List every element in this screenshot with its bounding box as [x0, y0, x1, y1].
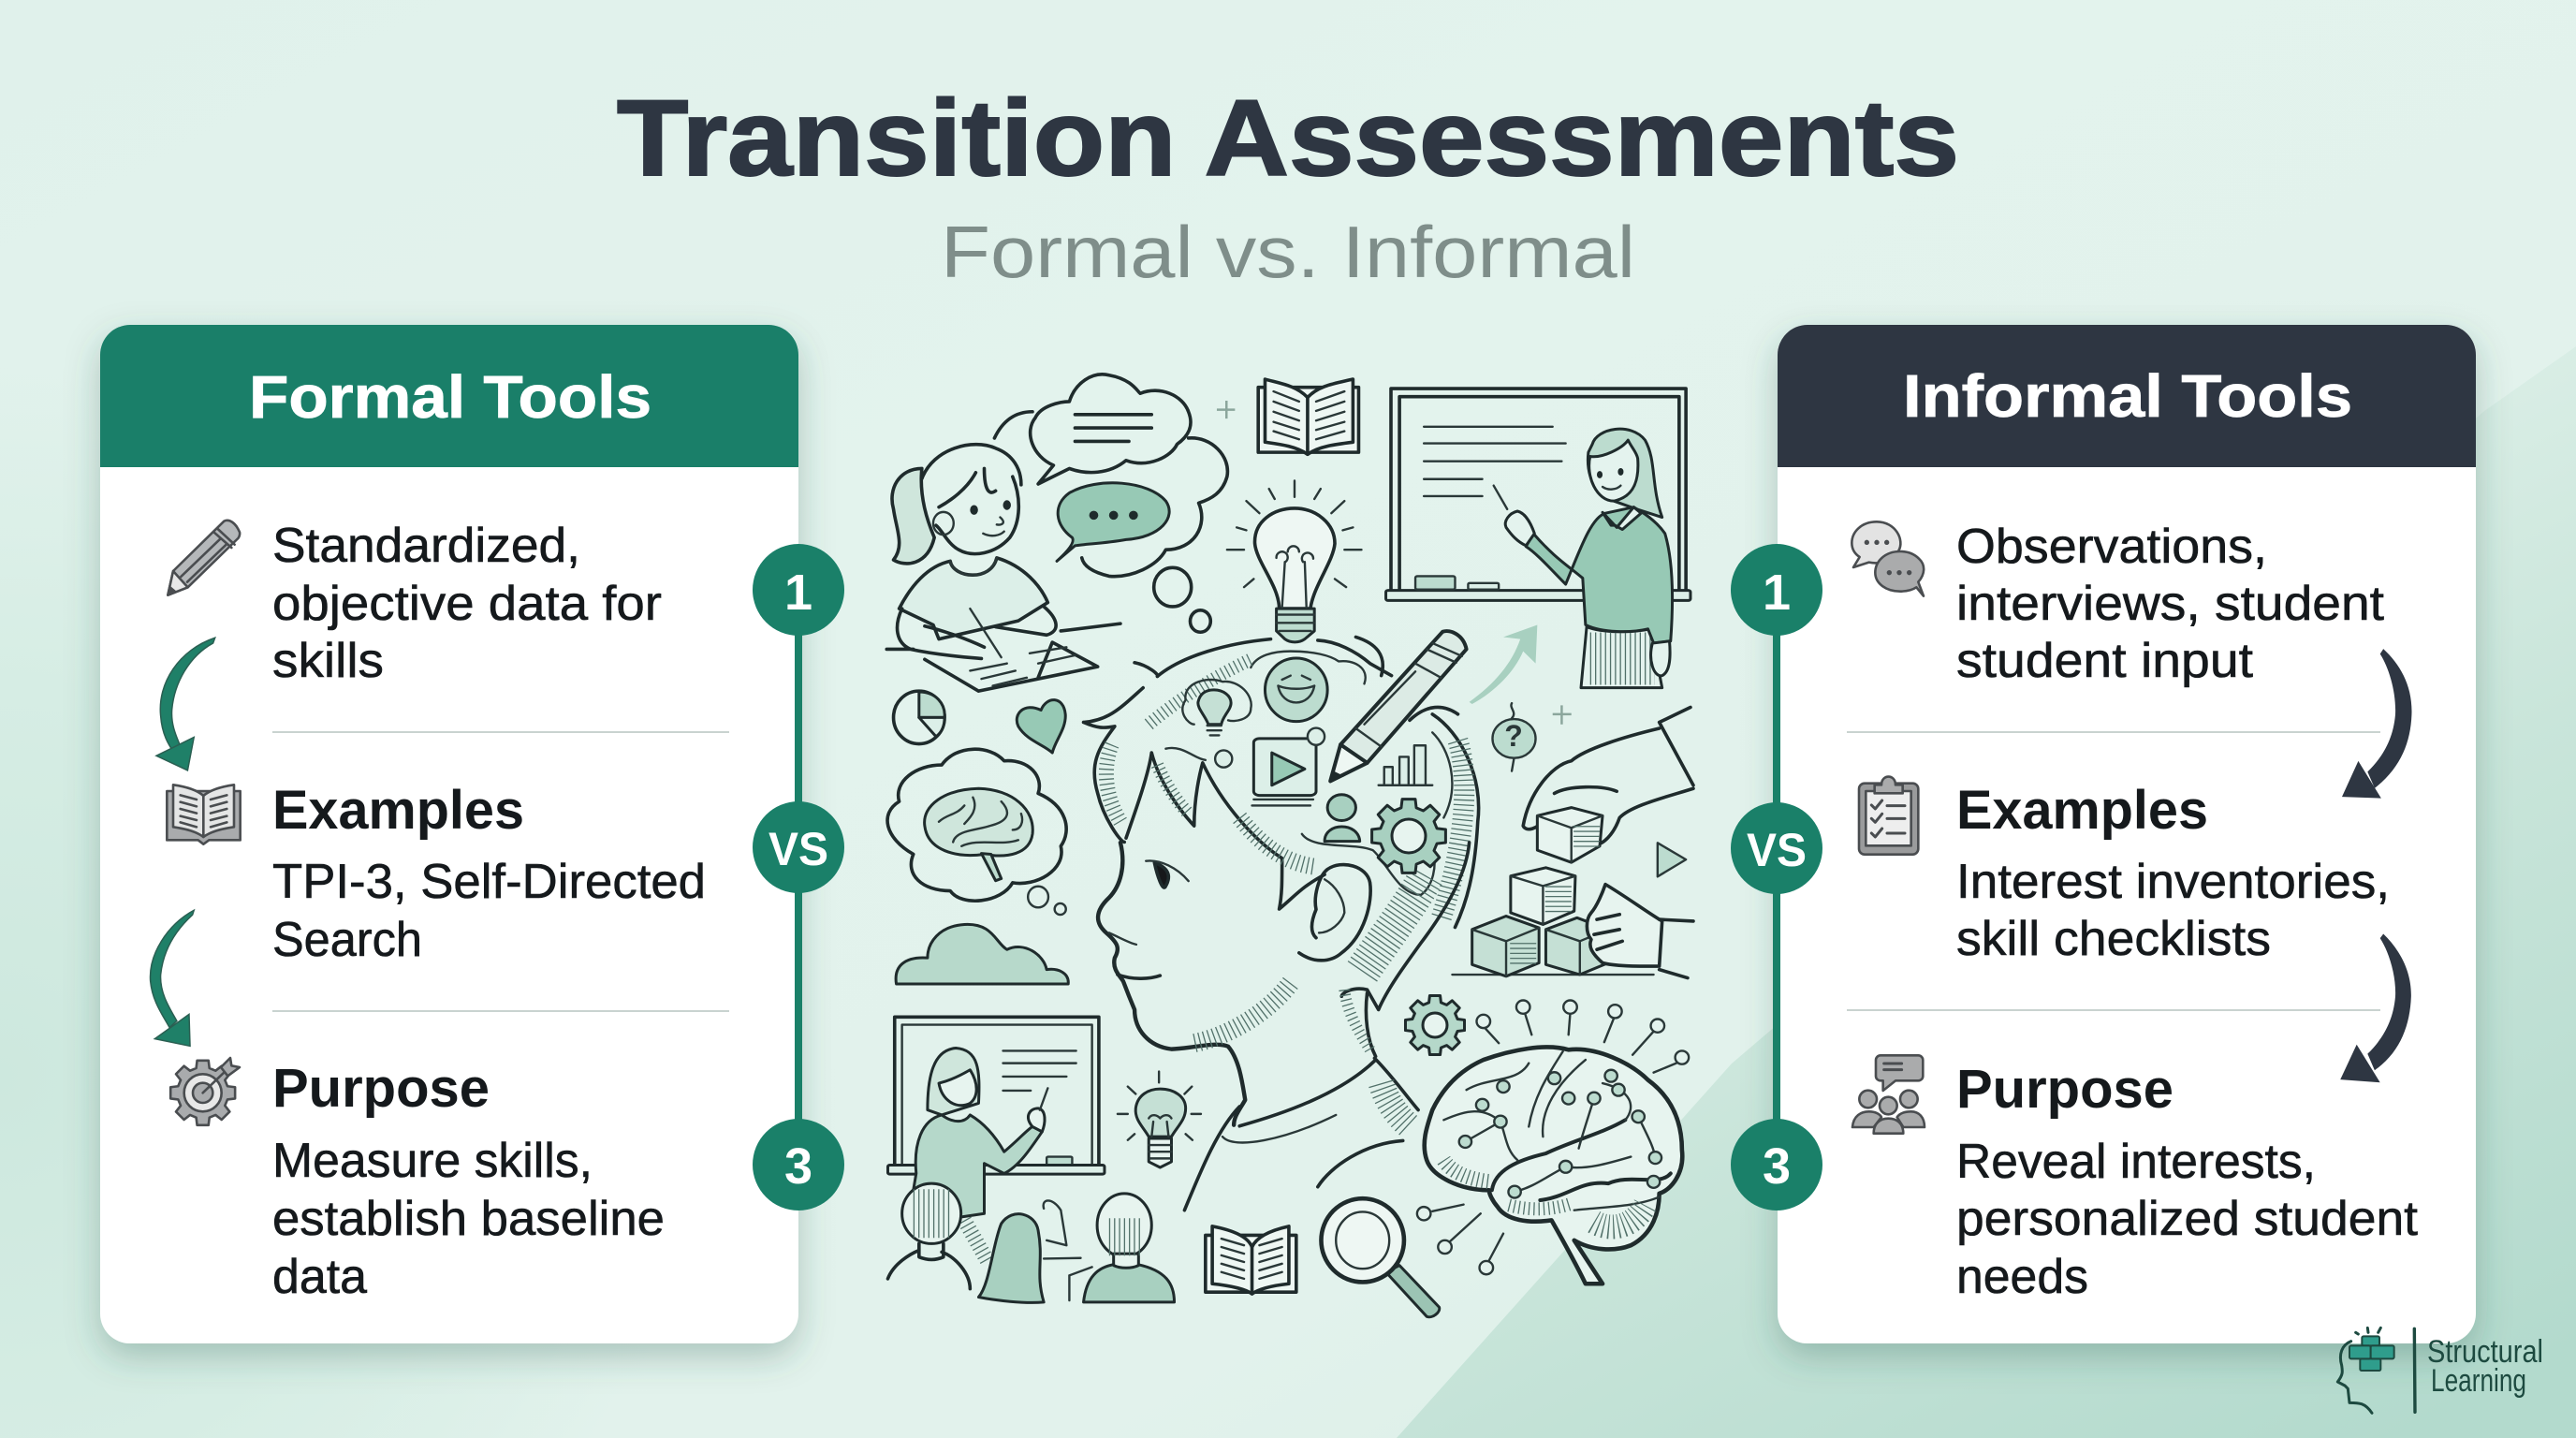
question mark badge: [1492, 703, 1536, 771]
gear and connector pins: [1417, 1001, 1689, 1274]
badge 3: [1731, 1119, 1822, 1211]
magnifying glass: [1321, 1198, 1440, 1317]
classroom with teacher and students: [887, 1017, 1175, 1302]
badge 3: 3: [1763, 1138, 1791, 1195]
central illustration: [886, 374, 1693, 1317]
icon: open book top: [1258, 379, 1358, 454]
plus mark: [1217, 401, 1235, 418]
icon: group discussion: [1852, 1055, 1925, 1134]
header: informal tools: Informal Tools: [1903, 362, 2352, 430]
header: formal tools: [100, 325, 798, 467]
timeline: informal: [1731, 544, 1822, 1211]
section: purpose: Purpose: [1956, 1059, 2174, 1120]
icon: clipboard checklist: [1859, 777, 1918, 855]
open book bottom: [1206, 1226, 1296, 1294]
section: purpose: Reveal interests,: [1956, 1135, 2316, 1189]
section: examples: Examples: [272, 780, 524, 841]
section: purpose: personalized student: [1956, 1192, 2419, 1246]
hand with cube: [1523, 707, 1693, 862]
badge VS: VS: [1747, 824, 1807, 876]
thought bubbles: [1154, 567, 1210, 632]
growth arrow: [1470, 624, 1537, 704]
section: purpose: [1956, 1059, 2419, 1304]
pie chart: [894, 691, 944, 744]
section: examples: Interest inventories,: [1956, 855, 2390, 909]
timeline: formal: [753, 544, 844, 1211]
title: Transition Assessments: [617, 79, 1959, 198]
plus mark right: [1553, 705, 1572, 725]
arrow: definition to examples: [156, 638, 215, 770]
thought cloud outer: [1082, 438, 1227, 577]
arrow: examples to purpose: [2340, 934, 2411, 1082]
logo: structural learning: [2337, 1328, 2543, 1413]
section: examples: TPI-3, Self-Directed: [272, 855, 706, 909]
speech bubble with dots: [1057, 483, 1169, 561]
section: purpose: Measure skills,: [272, 1134, 593, 1188]
illustration: upper half: [886, 374, 1693, 928]
card body: [1778, 325, 2476, 1343]
logo text: [2427, 1334, 2543, 1399]
section: examples: [1956, 780, 2390, 966]
brain in thought cloud: [887, 749, 1066, 915]
header: informal tools: [1778, 325, 2476, 467]
badge VS: VS: [768, 823, 828, 875]
badge 1: 1: [1763, 565, 1791, 621]
section: definition: objective data for: [272, 577, 662, 631]
header: formal tools: Formal Tools: [249, 363, 651, 431]
badge 3: [753, 1119, 844, 1211]
badge 3: 3: [784, 1138, 812, 1195]
student head hair and thought icons: [1084, 637, 1479, 928]
section: purpose: Purpose: [272, 1058, 490, 1119]
logo mark: [2337, 1328, 2415, 1413]
gear near brain: [1405, 995, 1465, 1055]
section: definition: Observations,: [1956, 520, 2267, 574]
section: examples: [272, 780, 706, 967]
gear hub near brain: [1423, 1013, 1447, 1037]
section: definition: [1956, 520, 2385, 688]
icon: pencil: [168, 521, 240, 595]
icon: open book: [167, 785, 241, 844]
question mark: ?: [1504, 719, 1523, 753]
blocks and hand: [1452, 868, 1693, 978]
arrow: definition to examples: [2342, 649, 2412, 799]
logo text: Learning: [2431, 1363, 2526, 1399]
section: definition: [272, 519, 662, 688]
whiteboard with teacher: [1386, 389, 1690, 688]
girl writing: [886, 445, 1120, 691]
section: examples: Search: [272, 913, 422, 967]
section: purpose: data: [272, 1250, 367, 1304]
section: definition: skills: [272, 634, 384, 688]
play triangle: [1658, 843, 1686, 876]
icon: light bulb: [1227, 480, 1361, 642]
badge 1: [753, 544, 844, 636]
heart: [1017, 700, 1065, 753]
badge VS: [1731, 802, 1822, 894]
section: purpose: establish baseline: [272, 1192, 665, 1246]
badge VS: [753, 801, 844, 893]
section: definition: student input: [1956, 634, 2254, 688]
badge 1: 1: [784, 565, 812, 621]
section: examples: Examples: [1956, 780, 2208, 841]
logo text: Structural: [2427, 1334, 2543, 1370]
gear in head: [1372, 800, 1445, 873]
illustration: lower half: [887, 843, 1693, 1317]
section: purpose: [272, 1058, 665, 1304]
section: definition: interviews, student: [1956, 577, 2385, 631]
detailed brain: [1425, 1047, 1682, 1284]
panel: informal tools: [1778, 325, 2476, 1343]
subtitle: Formal vs. Informal: [941, 211, 1635, 293]
big pencil: [1330, 631, 1467, 781]
student face and neck: [1098, 843, 1470, 1211]
icon: chat bubbles: [1852, 521, 1924, 596]
cloud: [896, 924, 1068, 984]
card body: [100, 325, 798, 1343]
small light bulb: [1118, 1072, 1201, 1167]
panel: formal tools: [100, 325, 798, 1343]
section: purpose: needs: [1956, 1250, 2088, 1304]
thought cloud with lines: [994, 374, 1191, 484]
section: definition: Standardized,: [272, 519, 580, 573]
section: examples: skill checklists: [1956, 912, 2271, 966]
arrow: examples to purpose: [151, 910, 194, 1046]
icon: target gear: [170, 1058, 240, 1125]
badge 1: [1731, 544, 1822, 636]
